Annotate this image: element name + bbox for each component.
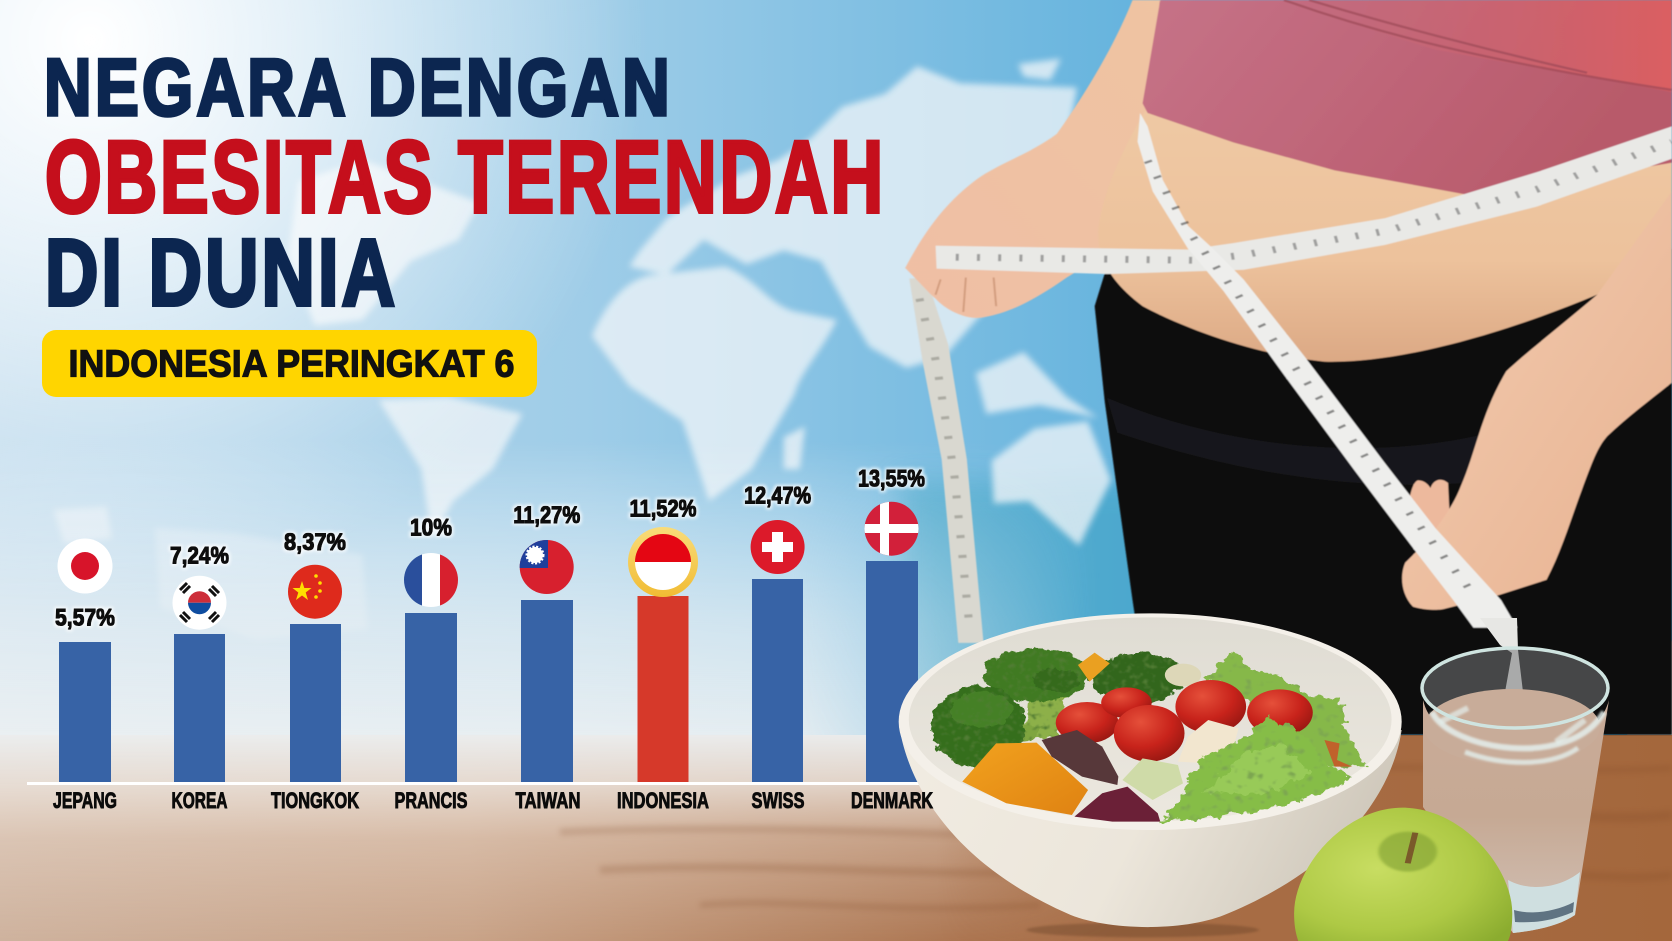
diagonal tape bbox=[1138, 113, 1517, 628]
bar Korea bbox=[174, 634, 225, 783]
flag: Jepang bbox=[58, 538, 112, 594]
pants bbox=[1095, 249, 1672, 735]
label Korea: KOREA bbox=[172, 788, 228, 813]
apple stem bbox=[1408, 833, 1415, 863]
green apple bbox=[1294, 808, 1512, 941]
label Tiongkok: TIONGKOK bbox=[271, 788, 359, 813]
horizontal tape marks bbox=[956, 142, 1672, 260]
tape above glass bbox=[1480, 618, 1523, 692]
bar Indonesia bbox=[638, 596, 688, 783]
chart category labels bbox=[53, 788, 933, 813]
bowl inside bbox=[909, 617, 1392, 821]
bar Prancis bbox=[405, 613, 457, 783]
tomatoes bbox=[1056, 680, 1313, 762]
flag: Taiwan bbox=[519, 539, 575, 595]
flag: Swiss bbox=[751, 520, 805, 574]
beet leaf bbox=[1074, 787, 1160, 822]
background: grey wall corner bbox=[1627, 640, 1672, 735]
glass of water bbox=[1422, 618, 1609, 933]
glass rim bbox=[1422, 648, 1608, 728]
title bbox=[44, 43, 886, 326]
squash bbox=[962, 743, 1088, 815]
salad bowl bbox=[899, 613, 1402, 937]
label Jepang: JEPANG bbox=[53, 788, 117, 813]
title line 3: DI DUNIA bbox=[45, 220, 398, 326]
table top bbox=[0, 735, 1672, 941]
left tape tail bbox=[909, 277, 984, 643]
value: Taiwan: 11,27% bbox=[513, 502, 580, 529]
purple leaf bbox=[1042, 730, 1118, 785]
pants fold shading bbox=[1107, 398, 1506, 485]
glass base dark streak bbox=[1514, 902, 1574, 922]
background: bottom fog bbox=[0, 460, 1074, 735]
value: Jepang: 5,57% bbox=[55, 605, 115, 632]
flag: Tiongkok bbox=[288, 564, 342, 620]
water and glass body bbox=[1423, 700, 1609, 933]
background: top left glow bbox=[0, 0, 1100, 800]
title line 2: OBESITAS TERENDAH bbox=[45, 120, 886, 234]
fingers behind diagonal tape bbox=[1408, 480, 1451, 551]
horizontal tape bbox=[936, 126, 1672, 274]
bowl shadow bbox=[1026, 923, 1259, 937]
flag: Indonesia with gold ring bbox=[628, 527, 698, 597]
bar Jepang bbox=[59, 642, 111, 783]
back lettuce bbox=[1206, 653, 1365, 767]
bar Denmark bbox=[866, 561, 918, 783]
value: Swiss: 12,47% bbox=[744, 483, 811, 510]
broccoli bbox=[931, 648, 1183, 767]
glass base bbox=[1508, 872, 1580, 933]
label Prancis: PRANCIS bbox=[394, 788, 468, 813]
shirt red tint bbox=[1274, 0, 1672, 92]
background: world map bbox=[53, 59, 1111, 640]
water highlights bbox=[1432, 708, 1604, 762]
apple dimple bbox=[1378, 832, 1437, 872]
chart: bars and baseline bbox=[27, 561, 920, 785]
glass upper wall bbox=[1422, 648, 1608, 728]
bar Swiss bbox=[752, 579, 803, 783]
flag: Denmark bbox=[864, 501, 920, 557]
value: Denmark: 13,55% bbox=[858, 466, 925, 493]
right arm and hand bbox=[1402, 191, 1672, 610]
value: Tiongkok: 8,37% bbox=[284, 529, 346, 556]
water surface bbox=[1424, 689, 1600, 765]
callout: Indonesia peringkat 6 bbox=[42, 330, 537, 397]
front lettuce bbox=[1163, 715, 1352, 822]
bar Tiongkok bbox=[290, 624, 341, 783]
bowl rim bbox=[899, 613, 1402, 830]
label Swiss: SWISS bbox=[752, 788, 804, 813]
belly bbox=[1098, 111, 1672, 362]
diagonal tape marks bbox=[1148, 161, 1476, 597]
shirt folds bbox=[1284, 0, 1672, 90]
label Taiwan: TAIWAN bbox=[516, 788, 580, 813]
value: Korea: 7,24% bbox=[170, 543, 229, 570]
left arm and hand bbox=[905, 0, 1163, 318]
left tape tail marks bbox=[919, 299, 970, 631]
callout: Indonesia peringkat 6: INDONESIA PERINGKAT 6 bbox=[68, 344, 514, 386]
back orange and cauliflower bbox=[1078, 653, 1201, 686]
bowl body bbox=[899, 727, 1402, 927]
carrot shreds bbox=[1324, 740, 1352, 767]
value: Prancis: 10% bbox=[410, 515, 452, 542]
bar Taiwan bbox=[521, 600, 573, 783]
flag: Korea bbox=[172, 576, 226, 630]
title line 1: NEGARA DENGAN bbox=[44, 43, 673, 133]
pale greens bbox=[1122, 758, 1183, 800]
baseline bbox=[27, 782, 920, 785]
shirt bbox=[1143, 0, 1672, 194]
label Indonesia: INDONESIA bbox=[617, 788, 709, 813]
flag: Prancis bbox=[404, 552, 458, 608]
person with measuring tape bbox=[905, 0, 1672, 735]
left hand finger shadows bbox=[936, 277, 996, 312]
label Denmark: DENMARK bbox=[851, 788, 933, 813]
chicken bbox=[1178, 720, 1239, 763]
apple body bbox=[1294, 808, 1512, 941]
value: Indonesia: 11,52% bbox=[630, 496, 696, 523]
